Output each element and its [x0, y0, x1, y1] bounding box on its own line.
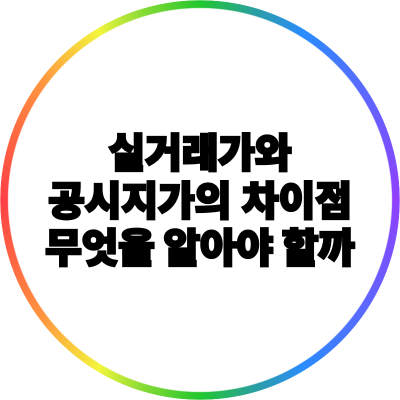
title line 3: 무엇을 알아야 할까 [45, 227, 355, 271]
title line 2: 공시지가의 차이점 [48, 180, 352, 224]
title [45, 132, 356, 271]
title line 1: 실거래가와 [108, 132, 292, 176]
